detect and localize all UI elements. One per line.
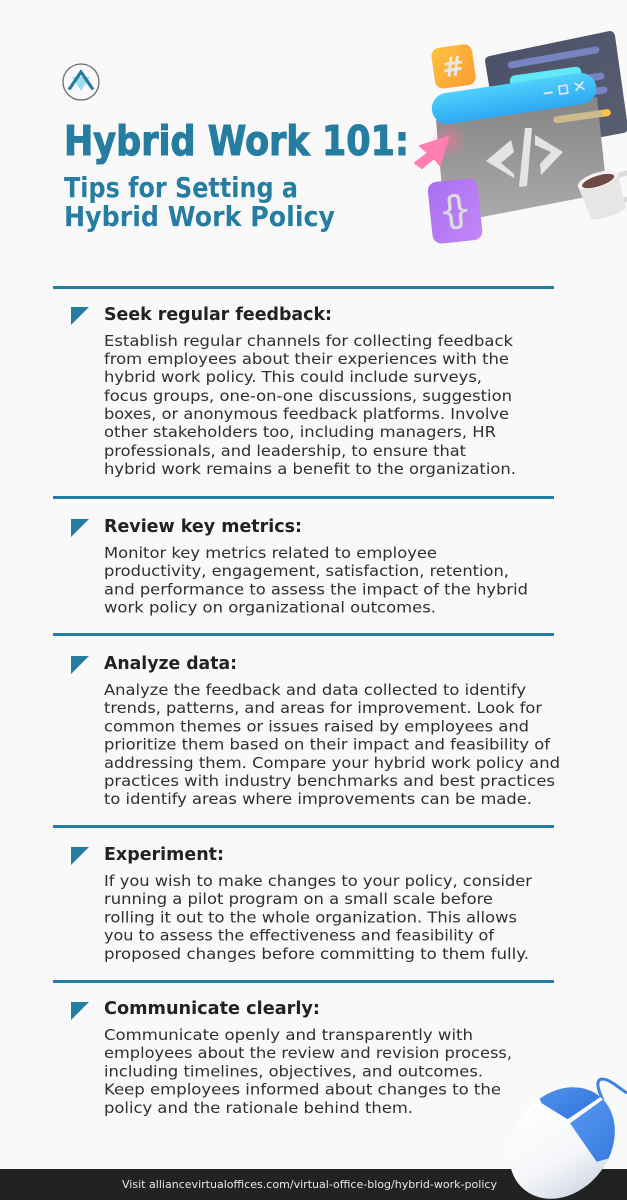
body 2: productivity, engagement, satisfaction, retention, [104,562,509,580]
body 4: running a pilot program on a small scale before [104,890,493,908]
glass window [431,97,607,223]
pink arrow [415,137,448,168]
blue title bar [430,71,598,126]
marker 1 [71,307,89,325]
marker 2 [71,519,89,537]
heading 5: Communicate clearly: [104,998,320,1019]
body 4: rolling it out to the whole organization. This allows [104,908,517,926]
body 2: and performance to assess the impact of the hybrid [104,580,528,598]
mouse buttons [540,1087,615,1162]
body 4: you to assess the effectiveness and feasibility of [104,926,495,944]
panel: experiment [71,844,533,963]
body 1: hybrid work policy. This could include surveys, [104,368,482,386]
body 1: other stakeholders too, including managers, HR [104,423,496,441]
braces tile: {} [436,186,474,234]
heading 3: Analyze data: [104,653,237,674]
body 2: work policy on organizational outcomes. [104,598,436,616]
coffee cup [576,162,627,223]
body 4: proposed changes before committing to them fully. [104,945,529,963]
body 3 [104,681,560,808]
divider 2 [53,496,554,499]
body 5: Communicate openly and transparently with [104,1026,473,1044]
subheading: Hybrid Work Policy [64,200,335,233]
body 3: common themes or issues raised by employees and [104,718,529,736]
hash tile: # [440,51,467,84]
body 1: professionals, and leadership, to ensure that [104,442,466,460]
dark back panel [490,36,623,150]
body 1: boxes, or anonymous feedback platforms. Involve [104,405,509,423]
body 3: Analyze the feedback and data collected to identify [104,681,526,699]
body 4 [104,872,533,963]
body 3: to identify areas where improvements can be made. [104,790,532,808]
logo [63,64,99,100]
divider 5 [53,980,554,983]
body 3: trends, patterns, and areas for improvement. Look for [104,699,543,717]
body 5: Keep employees informed about changes to the [104,1080,501,1098]
heading 4: Experiment: [104,844,224,865]
body 4: If you wish to make changes to your policy, consider [104,872,533,890]
body 3: addressing them. Compare your hybrid work policy and [104,754,560,772]
code symbol [486,128,563,187]
heading 1: Seek regular feedback: [104,304,332,325]
hash tile [430,43,477,90]
body 3: prioritize them based on their impact and feasibility of [104,736,551,754]
body 1: Establish regular channels for collecting feedback [104,332,513,350]
panel: seek regular feedback [71,304,516,478]
footer bar [0,1169,627,1200]
panel: analyze data [71,653,560,808]
divider 4 [53,825,554,828]
mouse cable [598,1079,627,1100]
divider 3 [53,633,554,636]
body 3: practices with industry benchmarks and best practices [104,772,555,790]
main heading: Hybrid Work 101: [64,117,409,165]
body 1: hybrid work remains a benefit to the organization. [104,460,516,478]
cyan tab [509,66,583,92]
body 2 [104,544,528,616]
body 5: employees about the review and revision process, [104,1044,512,1062]
icon: computer mouse [511,1078,627,1199]
body 5 [104,1026,512,1117]
panel: communicate clearly [71,998,512,1117]
panel: review key metrics [71,516,528,616]
body 1 [104,332,516,478]
illustration: code window [415,36,627,244]
braces tile [427,178,483,244]
body 1: from employees about their experiences with the [104,350,509,368]
marker 4 [71,847,89,865]
subheading [64,171,335,233]
heading 2: Review key metrics: [104,516,302,537]
body 2: Monitor key metrics related to employee [104,544,437,562]
marker 5 [71,1002,89,1020]
divider 1 [53,286,554,289]
body 5: including timelines, objectives, and outcomes. [104,1062,483,1080]
body 5: policy and the rationale behind them. [104,1099,413,1117]
body 1: focus groups, one-on-one discussions, suggestion [104,387,512,405]
marker 3 [71,656,89,674]
footer link text: Visit alliancevirtualoffices.com/virtual-office-blog/hybrid-work-policy [122,1178,497,1191]
subheading: Tips for Setting a [64,171,298,204]
title [64,117,409,233]
